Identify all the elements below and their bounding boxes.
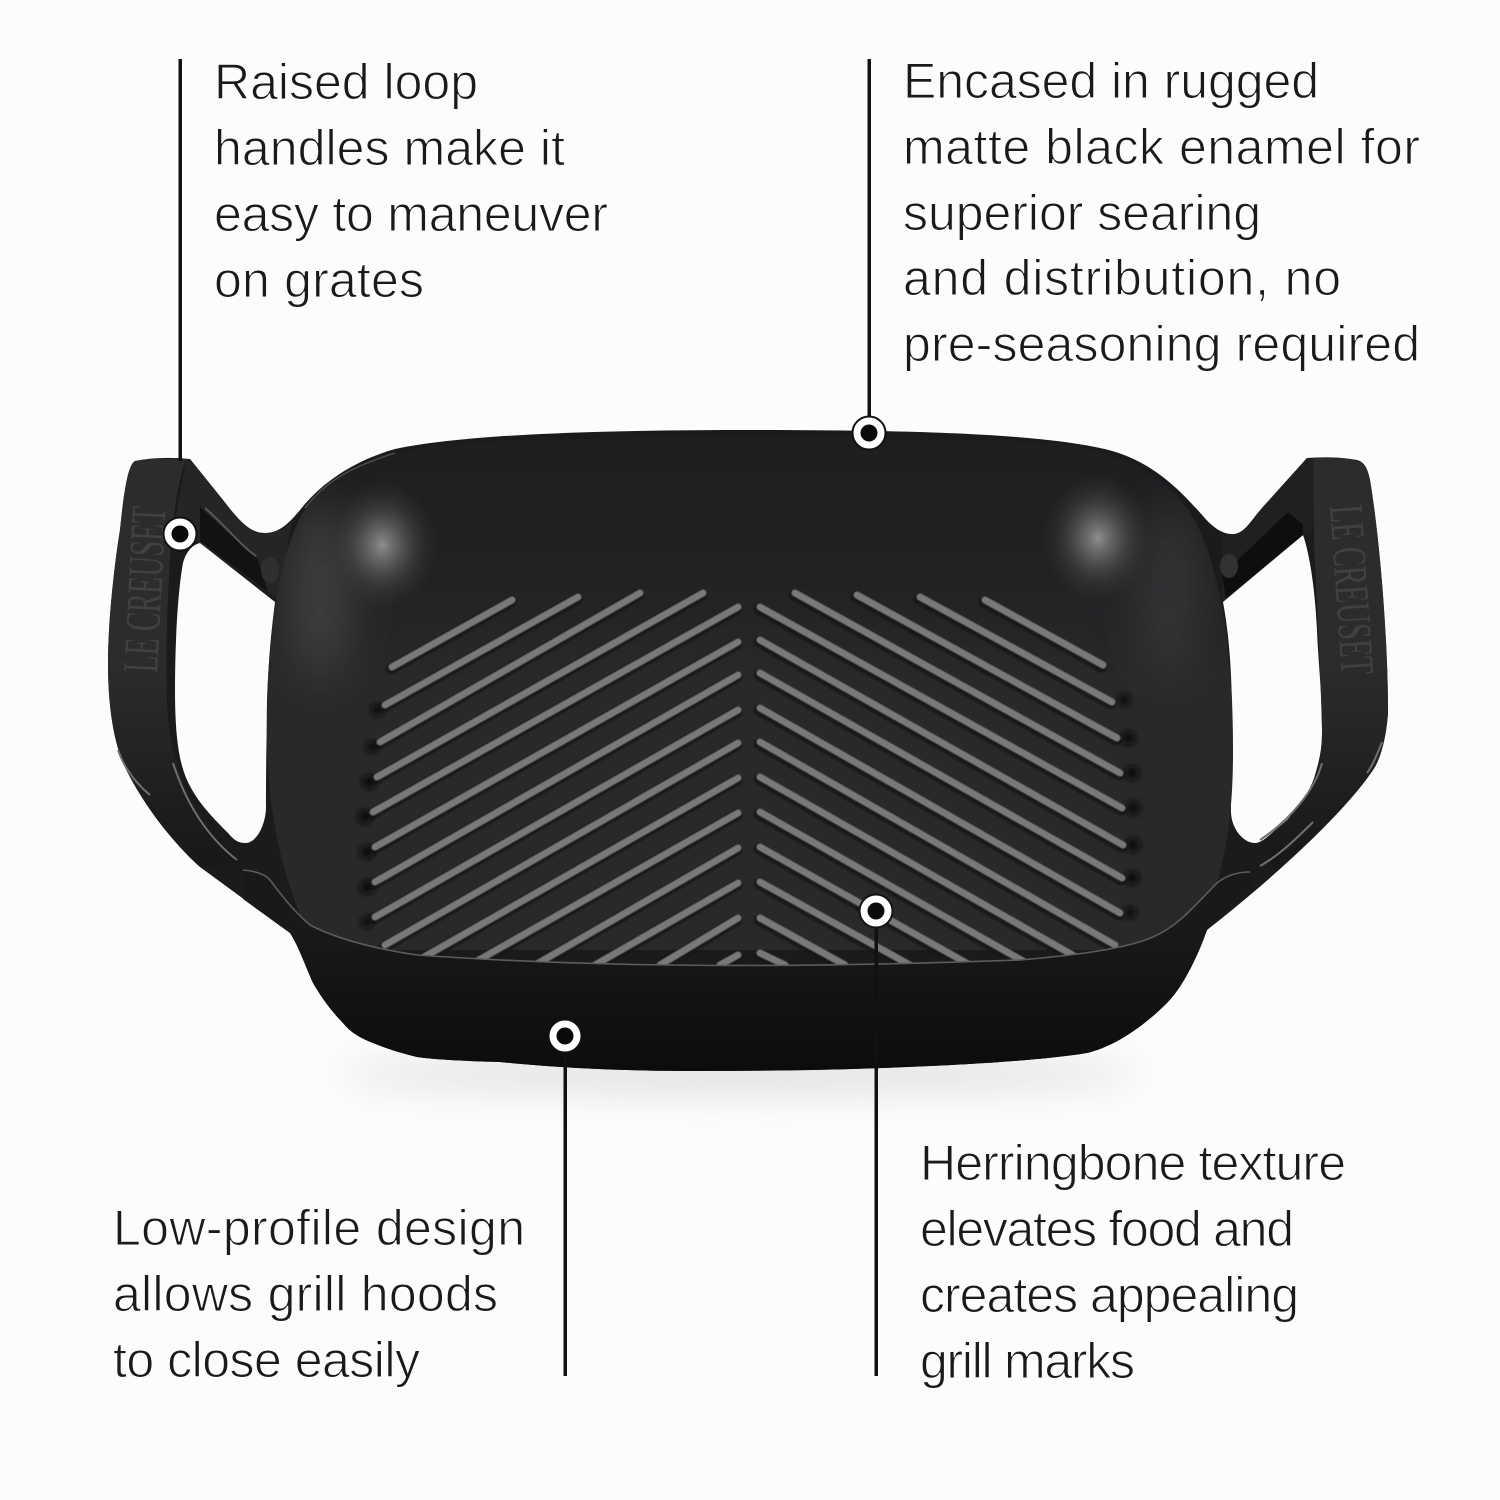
corner highlight left bbox=[343, 493, 426, 596]
corner highlight right bbox=[1054, 486, 1140, 590]
right handle strut bbox=[1222, 458, 1314, 602]
text: herringbone bbox=[920, 1135, 1346, 1389]
front rim line bbox=[243, 870, 1250, 965]
text: raised loop handles: Raised loop bbox=[214, 54, 478, 110]
text: herringbone: grill marks bbox=[920, 1333, 1135, 1389]
text: herringbone: Herringbone texture bbox=[920, 1135, 1346, 1191]
pan silhouette with handles bbox=[108, 430, 1388, 1071]
embossed logo right: LE CREUSET bbox=[1319, 503, 1384, 676]
pan interior bbox=[266, 479, 1234, 950]
rear rim sheen bbox=[305, 453, 395, 508]
text: herringbone: creates appealing bbox=[920, 1267, 1299, 1323]
marker: handles bbox=[164, 518, 196, 550]
callout line: low profile bbox=[564, 1048, 567, 1376]
interior base bbox=[266, 596, 1234, 950]
right handle strap bbox=[1262, 457, 1388, 870]
embossed logo left: LE CREUSET bbox=[112, 505, 177, 674]
marker: enamel bbox=[852, 416, 886, 450]
left wall sheen bbox=[286, 500, 354, 680]
right wall sheen bbox=[1137, 514, 1202, 656]
text: raised loop handles: on grates bbox=[214, 252, 424, 308]
left handle strap bbox=[108, 459, 240, 867]
text: enamel: pre-seasoning required bbox=[903, 316, 1420, 372]
right handle glints bbox=[1260, 742, 1382, 866]
marker: herringbone bbox=[860, 894, 892, 928]
text: raised loop handles: easy to maneuver bbox=[214, 186, 608, 242]
text: herringbone: elevates food and bbox=[920, 1201, 1294, 1257]
front wall bbox=[243, 870, 1252, 1071]
callout line: herringbone bbox=[874, 922, 878, 1376]
rib end scallops bbox=[358, 694, 1140, 928]
text: enamel bbox=[903, 53, 1420, 372]
callout line: handles bbox=[178, 59, 182, 461]
text: enamel: superior searing bbox=[903, 185, 1261, 241]
text: low profile bbox=[113, 1200, 525, 1388]
grill pan illustration bbox=[108, 430, 1388, 1071]
left handle strut bbox=[172, 459, 292, 600]
text: enamel: matte black enamel for bbox=[903, 119, 1420, 175]
text: raised loop handles: handles make it bbox=[214, 120, 565, 176]
text: low profile: to close easily bbox=[113, 1332, 420, 1388]
text: low profile: allows grill hoods bbox=[113, 1266, 498, 1322]
text: low profile: Low-profile design bbox=[113, 1200, 525, 1256]
marker: low profile bbox=[548, 1020, 582, 1052]
left handle glints bbox=[118, 750, 237, 860]
text: raised loop handles bbox=[214, 54, 608, 308]
herringbone rib shadows bbox=[372, 595, 1122, 967]
callout line: enamel bbox=[868, 59, 871, 421]
text: enamel: Encased in rugged bbox=[903, 53, 1319, 109]
text: enamel: and distribution, no bbox=[903, 250, 1341, 306]
herringbone ribs bbox=[373, 593, 1123, 965]
pan shadow bbox=[340, 1054, 1140, 1094]
